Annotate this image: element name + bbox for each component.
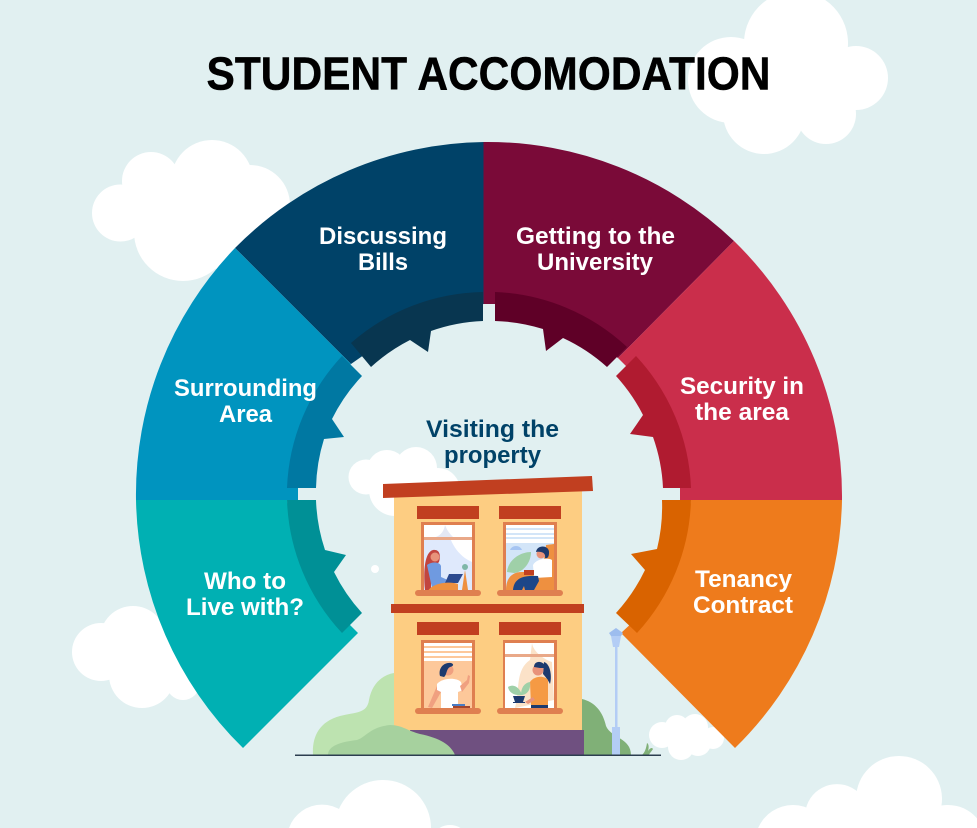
window: woman with plant [503, 640, 557, 709]
window: woman waving [421, 640, 475, 709]
segment: Who to Live with?: Live with? [186, 594, 304, 621]
cloud: centre behind building [348, 447, 460, 516]
segment: Tenancy Contract: Contract [693, 592, 793, 619]
cloud: bottom centre [289, 780, 460, 828]
segment: Who to Live with? [136, 500, 362, 748]
heading: Visiting the property: property [444, 442, 542, 469]
segment: Getting to the University: University [537, 249, 654, 276]
floor band [391, 604, 584, 613]
window: woman with laptop [421, 522, 475, 591]
segment: Getting to the University [484, 142, 734, 367]
bush: front left [328, 725, 455, 755]
building [383, 476, 593, 755]
bush: right [582, 699, 631, 755]
segment: Who to Live with?: Who to [204, 568, 286, 595]
roof [383, 476, 593, 498]
segment: Surrounding Area [136, 248, 362, 500]
street lamp [609, 628, 623, 755]
heading: Visiting the property [426, 416, 559, 469]
title: STUDENT ACCOMODATION [206, 48, 770, 100]
wall [394, 490, 582, 731]
segment: Discussing Bills [235, 142, 484, 367]
segment: Security in the area: the area [695, 399, 790, 426]
segment: Surrounding Area: Surrounding [174, 375, 317, 402]
window: woman in armchair [503, 522, 557, 591]
segment: Discussing Bills: Bills [358, 249, 408, 276]
cloud: lower left [72, 606, 200, 708]
heading: Visiting the property: Visiting the [426, 416, 559, 443]
segment: Tenancy Contract: Tenancy [695, 566, 793, 593]
cloud: upper left [92, 140, 290, 281]
lintels [417, 506, 561, 635]
dot: small cloud puff [371, 565, 379, 573]
segment: Tenancy Contract [616, 500, 842, 748]
grass tuft [642, 743, 653, 755]
segment: Security in the area [616, 241, 842, 500]
cloud: small right of building [649, 714, 724, 760]
window sills [415, 590, 563, 714]
segment: Getting to the University: Getting to the [516, 223, 675, 250]
ground line [295, 754, 661, 756]
bush: light left [313, 673, 420, 755]
cloud: bottom right [758, 756, 977, 828]
segment: Discussing Bills: Discussing [319, 223, 447, 250]
segment: Surrounding Area: Area [219, 401, 273, 428]
segment: Security in the area: Security in [680, 373, 804, 400]
base [410, 730, 584, 755]
cloud: top right [688, 0, 888, 154]
